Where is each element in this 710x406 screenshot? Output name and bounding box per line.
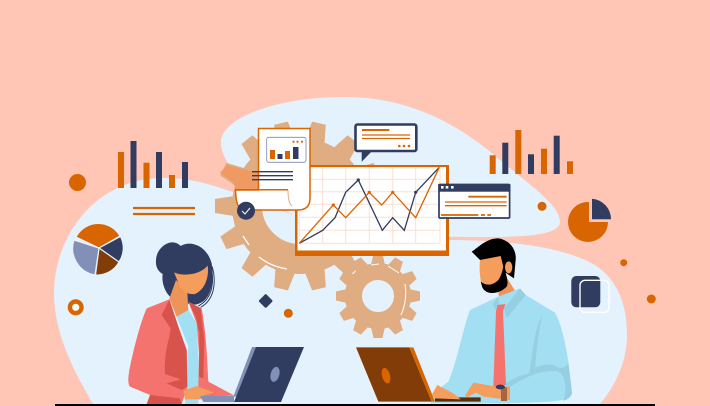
orange dot left <box>69 174 86 191</box>
gear shine <box>243 236 287 269</box>
shirt <box>430 288 572 403</box>
left hand <box>432 385 461 399</box>
neck <box>498 273 517 305</box>
face <box>480 256 507 292</box>
right bar chart <box>490 130 573 174</box>
top <box>177 310 199 404</box>
hand <box>183 386 214 399</box>
orange dot right <box>538 202 546 211</box>
speech bubble <box>356 124 416 162</box>
watch <box>496 385 507 401</box>
blazer <box>128 299 233 404</box>
left bar chart <box>118 141 188 188</box>
woman with laptop <box>128 242 304 404</box>
ear <box>505 261 512 273</box>
hair <box>472 238 516 278</box>
double lines <box>133 208 195 214</box>
ground line <box>55 404 655 406</box>
neck <box>169 280 188 319</box>
line chart panel <box>295 165 449 256</box>
tie <box>493 304 506 387</box>
gear highlight <box>220 165 258 190</box>
pie chart right <box>568 199 611 242</box>
blazer shading <box>147 299 204 404</box>
overlapping squares <box>571 276 609 312</box>
laptop <box>356 347 481 402</box>
laptop <box>200 347 304 402</box>
hair <box>156 242 213 304</box>
browser window <box>438 184 510 218</box>
beard <box>481 263 508 293</box>
small dots right <box>620 259 656 304</box>
ring icon <box>70 302 81 313</box>
lower pale blob <box>54 178 627 404</box>
shirt shading <box>493 288 572 401</box>
document with chart <box>235 128 310 210</box>
small gear <box>336 254 420 338</box>
small gear shine <box>371 264 406 315</box>
upper pale blob <box>221 97 560 237</box>
man with laptop <box>356 238 572 403</box>
face <box>174 266 208 294</box>
pie chart left <box>73 223 123 275</box>
right hand <box>465 383 510 400</box>
orange dot center <box>284 309 293 318</box>
hair strands <box>197 263 214 307</box>
large gear <box>215 121 385 291</box>
check badge <box>237 202 255 220</box>
diamond <box>258 294 273 308</box>
